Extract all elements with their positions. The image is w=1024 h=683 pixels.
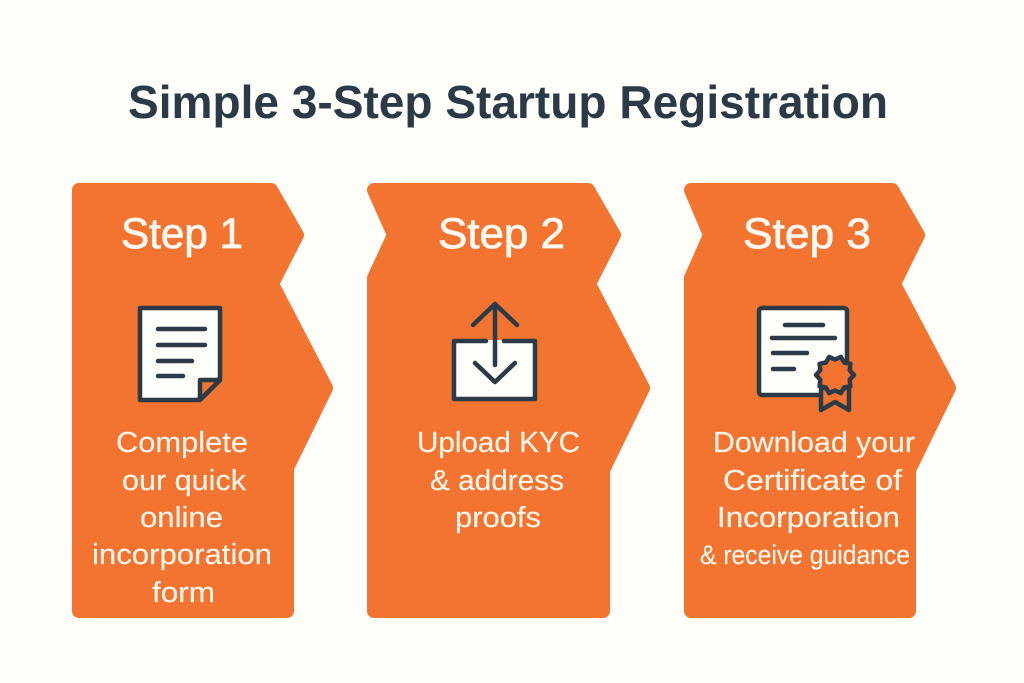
text: step 2 description: proofs xyxy=(455,502,541,534)
panel: step 3 xyxy=(691,190,949,611)
text: step 1 description: online xyxy=(140,502,223,534)
text: step 3 description: Download your xyxy=(713,427,915,459)
panel: step 1 xyxy=(79,190,326,611)
panel shape: step 1 xyxy=(79,190,326,611)
text: step 1 description: our quick xyxy=(122,465,247,497)
text: step 2 description: & address xyxy=(430,465,564,497)
panel shape: step 3 xyxy=(691,190,949,611)
title: Simple 3-Step Startup Registration xyxy=(128,76,888,128)
text: step 2 description: Upload KYC xyxy=(417,427,580,459)
text: step 3 description: Incorporation xyxy=(717,502,900,534)
icon: document xyxy=(140,308,220,400)
heading: step 2: Step 2 xyxy=(438,210,565,258)
text: step 3 description: Certificate of xyxy=(723,465,903,497)
heading: step 3: Step 3 xyxy=(743,210,871,258)
icon: upload and download xyxy=(452,304,537,401)
text: step 3 description xyxy=(700,427,915,570)
text: step 3 description: & receive guidance xyxy=(700,540,910,570)
panel shape: step 2 xyxy=(374,190,643,611)
text: step 2 description xyxy=(417,427,580,534)
text: step 1 description xyxy=(92,427,272,609)
text: step 1 description: form xyxy=(152,577,215,609)
icon: certificate xyxy=(759,308,854,410)
heading: step 1: Step 1 xyxy=(121,210,243,258)
text: step 1 description: incorporation xyxy=(92,539,272,571)
text: step 1 description: Complete xyxy=(116,427,248,459)
panel: step 2 xyxy=(374,190,643,611)
